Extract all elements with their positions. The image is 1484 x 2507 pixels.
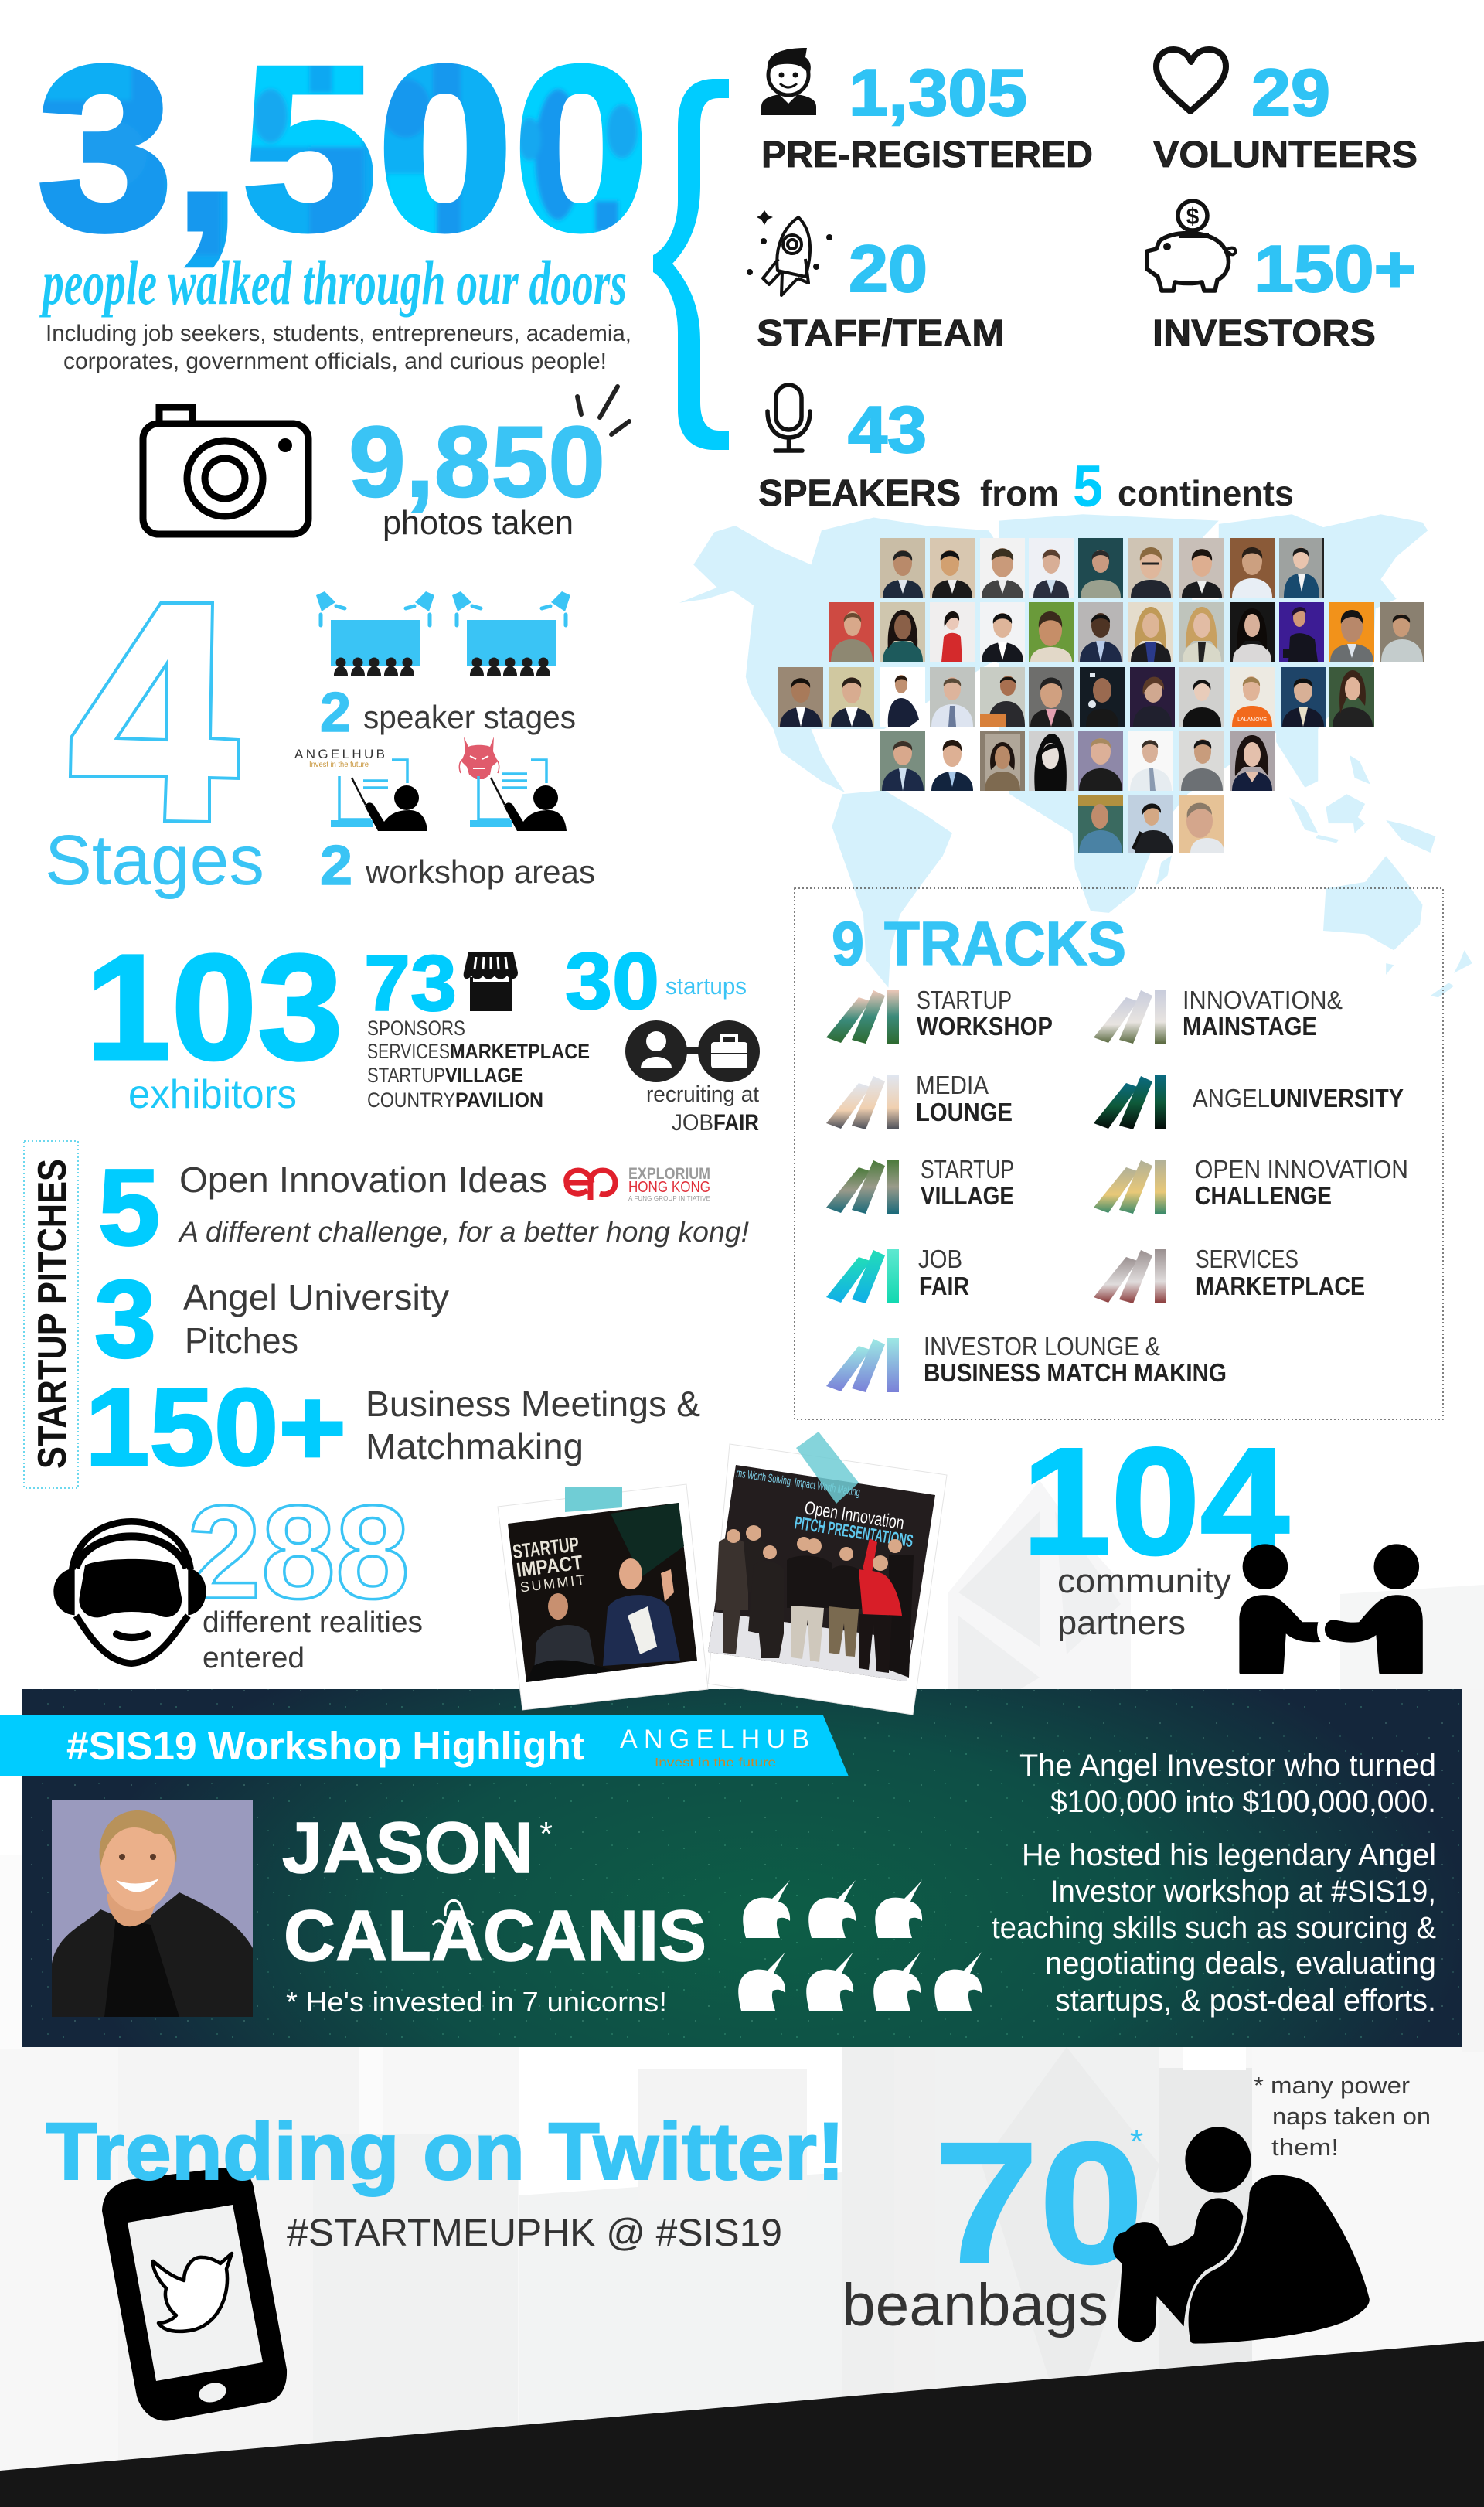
sponsors stat: SPONSORS — [367, 1017, 465, 1040]
photos taken stat: photos taken — [383, 504, 574, 542]
sponsors stat: VILLAGE — [445, 1064, 523, 1087]
icon: speaker stage one — [316, 591, 434, 676]
stat: volunteers — [1153, 49, 1418, 175]
logo: explorium — [567, 1165, 710, 1202]
map: australia — [1323, 856, 1422, 975]
icon: workshop presenter one — [331, 760, 427, 831]
icon: market stall — [464, 952, 518, 1011]
name: JASON — [282, 1807, 533, 1888]
map: new zealand — [1431, 950, 1472, 997]
startups job fair stat: recruiting at — [646, 1082, 759, 1107]
beanbags stat: 70 — [934, 2107, 1144, 2300]
heading: 9 — [832, 909, 864, 978]
attendees description — [46, 321, 631, 374]
trending heading: Trending on Twitter! — [46, 2107, 845, 2197]
icon: rocket — [747, 210, 832, 295]
track: innovation mainstage: INNOVATION& — [1183, 986, 1343, 1014]
4 stages outline number: Stages — [45, 821, 264, 900]
startups job fair stat: FAIR — [713, 1110, 759, 1136]
sponsors stat: PAVILION — [455, 1088, 543, 1112]
pitch: business meetings: Matchmaking — [366, 1426, 584, 1466]
beanbag footnote — [1254, 2072, 1431, 2161]
heading: TRACKS — [884, 909, 1126, 978]
track: investor lounge — [826, 1332, 1227, 1392]
stat: speakers: 43 — [848, 393, 927, 467]
stat: speakers: SPEAKERS — [758, 473, 961, 514]
name: * — [539, 1815, 553, 1853]
icon: vr headset — [53, 1521, 206, 1664]
stat: pre-registered — [761, 48, 1093, 175]
track: investor lounge: INVESTOR LOUNGE & — [924, 1332, 1160, 1361]
icon: piggy bank: $ — [1186, 204, 1200, 230]
photos taken stat: 9,850 — [349, 405, 605, 518]
track: startup workshop: WORKSHOP — [917, 1012, 1053, 1041]
script subtitle: people walked through our doors — [39, 247, 627, 318]
name: * He's invested in 7 unicorns! — [286, 1986, 667, 2018]
sponsors stat: COUNTRY — [367, 1088, 455, 1112]
beanbag footnote: * many power — [1254, 2072, 1410, 2099]
community partners stat: 104 — [1022, 1416, 1289, 1586]
track: startup village: STARTUP — [921, 1155, 1014, 1184]
track: services marketplace: SERVICES — [1196, 1245, 1298, 1273]
exhibitors stat: exhibitors — [128, 1072, 297, 1117]
hashtag text: #STARTMEUPHK @ #SIS19 — [287, 2211, 782, 2254]
icon: phone with twitter bird — [102, 2168, 287, 2421]
polaroid photo one: IMPACT — [515, 1551, 584, 1582]
map: asia — [1219, 514, 1428, 788]
pitch: open innovation ideas — [98, 1146, 749, 1268]
polaroid photo two: ms Worth Solving, Impact Worth Making — [735, 1466, 861, 1499]
story text: teaching skills such as sourcing & — [992, 1911, 1436, 1945]
pitch: angel university: Angel University — [183, 1277, 449, 1317]
icon: person and briefcase — [625, 1020, 760, 1082]
map: south east asia islands — [1289, 755, 1435, 853]
track: job fair: FAIR — [919, 1272, 969, 1300]
track: startup village — [826, 1155, 1014, 1214]
banner: Invest in the future — [655, 1756, 776, 1770]
icon: person on beanbag — [1113, 2127, 1370, 2344]
pitch: business meetings — [85, 1366, 700, 1489]
banner — [0, 1715, 849, 1776]
curly brace — [653, 79, 729, 450]
pitch: angel university: Pitches — [185, 1320, 298, 1361]
workshop areas label: workshop areas — [365, 853, 595, 890]
track: innovation mainstage: MAINSTAGE — [1183, 1012, 1317, 1041]
stat: staff team: 20 — [849, 233, 928, 306]
world map — [679, 514, 1472, 997]
map: south america — [832, 790, 952, 988]
track: innovation mainstage — [1094, 986, 1343, 1044]
polaroid photo two: PITCH PRESENTATIONS — [793, 1512, 914, 1551]
beanbag footnote: naps taken on — [1272, 2103, 1431, 2130]
community partners stat: partners — [1057, 1604, 1186, 1642]
sponsors stat: 73 — [364, 939, 457, 1027]
photos taken stat — [349, 387, 629, 542]
beanbag footnote: them! — [1271, 2134, 1339, 2161]
pitch: open innovation ideas: A different challenge, for a better hong kong! — [178, 1216, 749, 1248]
story text: $100,000 into $100,000,000. — [1050, 1785, 1436, 1819]
4 stages outline number — [45, 603, 264, 900]
track: open innovation challenge — [1094, 1155, 1408, 1214]
sponsors stat: STARTUP — [367, 1064, 445, 1087]
stat: staff team: STAFF/TEAM — [757, 313, 1005, 354]
startups job fair stat — [565, 937, 760, 1136]
speaker stages label: 2 — [320, 682, 351, 744]
story text — [992, 1749, 1436, 2018]
logo: explorium: EXPLORIUM — [628, 1165, 710, 1183]
stat: speakers: 5 — [1073, 454, 1103, 519]
pitch: angel university — [94, 1258, 449, 1381]
vr stat number: 288 — [187, 1478, 410, 1626]
stat: pre-registered: 1,305 — [849, 56, 1027, 130]
map: europe and africa — [926, 599, 1281, 913]
track: job fair: JOB — [918, 1245, 962, 1273]
track: startup workshop: STARTUP — [917, 986, 1012, 1014]
track: startup workshop — [826, 986, 1053, 1044]
vr stat label — [203, 1606, 423, 1674]
attendees description: Including job seekers, students, entrepreneurs, academia, — [46, 321, 631, 346]
logo: angelhub small — [294, 747, 385, 769]
portrait: jason calacanis — [52, 1800, 253, 2017]
pitch: angel university: 3 — [94, 1258, 156, 1381]
stat: pre-registered: PRE-REGISTERED — [761, 135, 1093, 175]
track: angel university: UNIVERSITY — [1270, 1084, 1404, 1112]
map: greenland and arctic — [999, 514, 1219, 625]
vr stat label: different realities — [203, 1606, 423, 1639]
track: media lounge: LOUNGE — [916, 1098, 1013, 1126]
icon: workshop presenter two — [470, 760, 567, 831]
stat: speakers — [758, 385, 1294, 519]
community partners stat: community — [1057, 1562, 1231, 1600]
dark floor — [0, 2341, 1484, 2507]
story text: negotiating deals, evaluating — [1045, 1947, 1436, 1981]
track: angel university: ANGEL — [1193, 1084, 1270, 1112]
stat: investors — [1147, 201, 1416, 354]
story text: Investor workshop at #SIS19, — [1050, 1875, 1436, 1909]
polaroid photo two — [708, 1432, 947, 1715]
track: open innovation challenge: OPEN INNOVATION — [1195, 1155, 1408, 1184]
banner: ANGELHUB — [620, 1725, 809, 1754]
speaker portrait grid: LALAMOVE — [1237, 717, 1267, 723]
polaroid photo two: Open Innovation — [803, 1497, 906, 1534]
exhibitors stat: 103 — [85, 923, 343, 1092]
pitch: business meetings: 150+ — [85, 1366, 346, 1489]
story text: startups, & post-deal efforts. — [1055, 1984, 1436, 2018]
logo: angelhub small: ANGELHUB — [294, 747, 385, 761]
story text: He hosted his legendary Angel — [1022, 1838, 1436, 1872]
pitch: open innovation ideas: Open Innovation Ideas — [179, 1160, 547, 1200]
icon: speaker stage two — [452, 591, 570, 676]
track: investor lounge: BUSINESS MATCH MAKING — [924, 1358, 1227, 1387]
icon: dragon logo — [459, 737, 499, 779]
stat: investors: 150+ — [1254, 233, 1416, 306]
track: services marketplace: MARKETPLACE — [1196, 1272, 1365, 1300]
stat: speakers: from — [980, 473, 1059, 513]
speaker stages label — [320, 682, 576, 744]
logo: explorium: A FUNG GROUP INITIATIVE — [628, 1195, 710, 1202]
stat: speakers: continents — [1118, 473, 1294, 513]
icon: microphone — [768, 385, 810, 451]
stat: investors: INVESTORS — [1152, 313, 1376, 354]
startups job fair stat: JOB — [672, 1110, 713, 1136]
panel: workshop highlight — [0, 1689, 1462, 2047]
sponsors stat: MARKETPLACE — [450, 1040, 590, 1063]
name: CALACANIS — [284, 1896, 706, 1976]
map: north america — [679, 517, 999, 792]
beanbags stat — [842, 2107, 1144, 2338]
vr stat label: entered — [203, 1642, 305, 1674]
panel: 9 tracks — [795, 888, 1443, 1419]
polaroid photo one: SUMMIT — [519, 1572, 586, 1596]
speaker stages label: speaker stages — [363, 699, 576, 735]
track: startup village: VILLAGE — [921, 1181, 1014, 1210]
icon: handshake — [1239, 1544, 1423, 1674]
sponsors stat — [364, 939, 590, 1112]
beanbags stat: * — [1130, 2123, 1143, 2161]
stat: staff team — [747, 210, 1005, 354]
map: madagascar — [1156, 855, 1172, 885]
icon: person — [761, 48, 816, 115]
track: angel university — [1094, 1075, 1404, 1129]
icon: piggy bank — [1147, 201, 1235, 291]
polaroid photo one: STARTUP — [512, 1532, 580, 1563]
speaker portrait grid — [778, 538, 1424, 853]
icon: camera — [143, 407, 308, 534]
logo: explorium: HONG KONG — [628, 1179, 710, 1196]
story text: The Angel Investor who turned — [1019, 1749, 1436, 1783]
polaroid photo one — [498, 1484, 708, 1710]
stat: volunteers: VOLUNTEERS — [1153, 135, 1418, 175]
track: open innovation challenge: CHALLENGE — [1195, 1181, 1332, 1210]
track: services marketplace — [1094, 1245, 1365, 1303]
attendees description: corporates, government officials, and curious people! — [63, 349, 607, 374]
banner: #SIS19 Workshop Highlight — [66, 1724, 584, 1768]
background skyline — [0, 1480, 1484, 2481]
workshop areas label — [320, 835, 595, 897]
startups job fair stat: 30 — [565, 937, 659, 1027]
name — [282, 1807, 706, 2018]
track: media lounge — [826, 1071, 1013, 1129]
stat: volunteers: 29 — [1251, 56, 1330, 130]
track: job fair — [826, 1245, 969, 1303]
beanbags stat: beanbags — [842, 2272, 1108, 2338]
startups job fair stat: startups — [665, 972, 747, 1000]
track: media lounge: MEDIA — [916, 1071, 989, 1099]
workshop areas label: 2 — [320, 835, 352, 897]
icon: heart — [1156, 49, 1226, 111]
logo: angelhub small: Invest in the future — [309, 761, 369, 769]
icon: seven unicorns — [738, 1880, 982, 2011]
sponsors stat: SERVICES — [367, 1040, 450, 1063]
startup pitches vertical label: STARTUP PITCHES — [30, 1159, 75, 1469]
headline number 3,500: 3,500 — [37, 18, 649, 278]
pitch: business meetings: Business Meetings & — [366, 1384, 700, 1424]
pitch: open innovation ideas: 5 — [98, 1146, 160, 1268]
